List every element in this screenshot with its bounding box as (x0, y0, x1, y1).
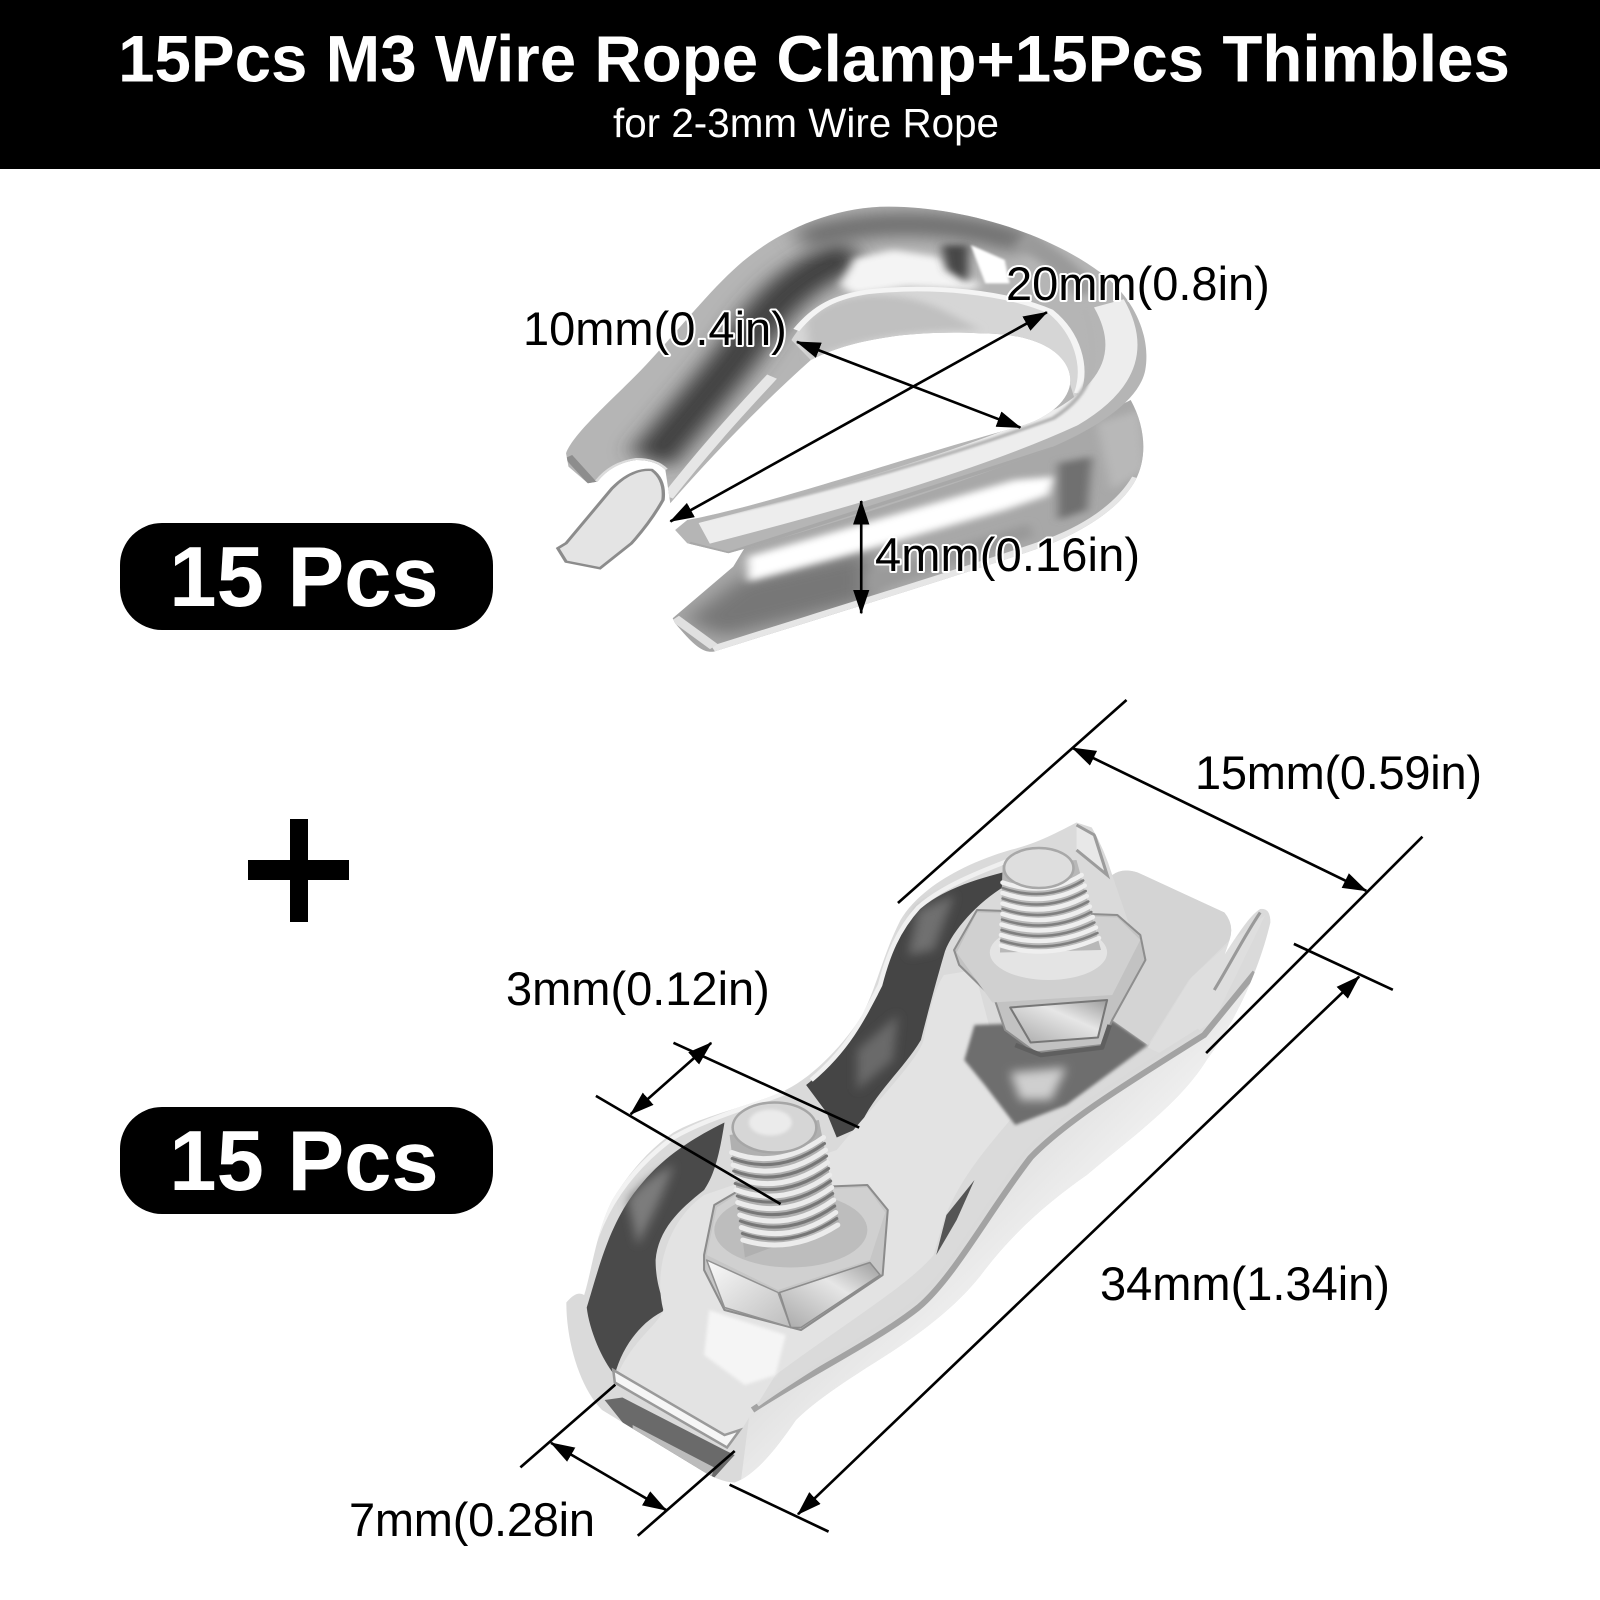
arrow: thimble 4mm (860, 501, 863, 613)
clamp quantity badge: 15 Pcs (169, 1114, 439, 1209)
top nut (954, 910, 1145, 1055)
top bolt (1000, 848, 1101, 952)
center plate (617, 970, 1010, 1445)
label: 10mm: 10mm(0.4in) (523, 302, 787, 355)
plate end (613, 1370, 740, 1448)
thimble back flange (673, 400, 1145, 652)
clamp quantity badge (120, 1107, 493, 1214)
dimension lines (520, 312, 1422, 1536)
dark channel lower left (587, 1122, 724, 1375)
slot below plate (605, 1398, 735, 1478)
clamp illustration (566, 822, 1276, 1490)
label: 15mm: 15mm(0.59in) (1195, 746, 1482, 799)
title: 15Pcs M3 Wire Rope Clamp+15Pcs Thimbles (118, 22, 1510, 96)
label: 4mm: 4mm(0.16in) (875, 528, 1140, 581)
label: 7mm: 7mm(0.28in (349, 1493, 595, 1546)
thimble quantity badge: 15 Pcs (169, 530, 439, 625)
label: 3mm: 3mm(0.12in) (506, 962, 770, 1015)
dark channel upper (806, 872, 1003, 1138)
shadow below top nut (964, 1020, 1148, 1125)
arrow: thimble 10mm (797, 342, 1020, 428)
subtitle: for 2-3mm Wire Rope (613, 100, 999, 146)
dimension: clamp 15mm (898, 700, 1422, 1053)
clamp weld edge (753, 972, 1255, 1410)
thimble quantity badge (120, 523, 493, 630)
bottom bolt (730, 1102, 839, 1258)
label: 34mm: 34mm(1.34in) (1100, 1257, 1390, 1310)
dimension: clamp 3mm (596, 1043, 859, 1204)
dimension: clamp 34mm (730, 944, 1393, 1532)
clamp front face (741, 984, 1250, 1480)
plus sign (248, 819, 349, 922)
label: 20mm: 20mm(0.8in) (1006, 257, 1270, 310)
thimble illustration (558, 207, 1146, 652)
bottom nut (704, 1185, 888, 1330)
thimble main body (566, 207, 1146, 553)
top right plate (1112, 870, 1231, 1045)
thimble split tongue (558, 470, 663, 568)
header banner (0, 0, 1600, 169)
dimension: clamp 7mm (520, 1385, 735, 1536)
arrow: thimble 20mm (670, 312, 1047, 521)
clamp body (566, 822, 1276, 1490)
